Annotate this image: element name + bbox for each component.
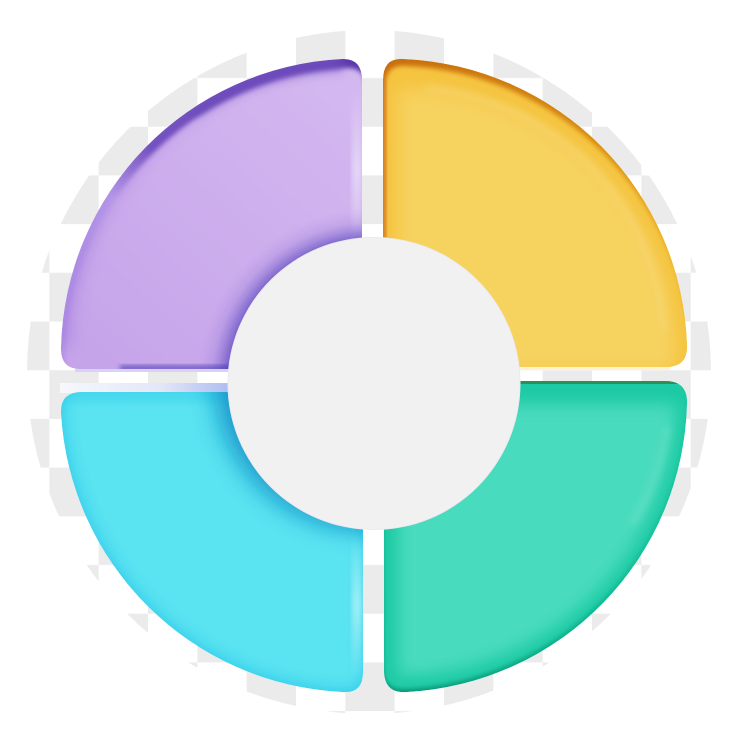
reflections in the gaps	[60, 367, 670, 393]
segment: purple quarter	[61, 59, 362, 369]
main green face	[398, 404, 676, 676]
main yellow face	[398, 90, 676, 372]
hub shadow on cyan	[202, 392, 363, 544]
segment: green quarter	[380, 378, 690, 692]
center hub circle	[228, 237, 520, 530]
highlight on purple right edge	[350, 112, 362, 226]
highlight on cyan right edge	[352, 530, 362, 680]
segment: cyan quarter	[61, 392, 363, 692]
hub shadow on purple	[208, 217, 362, 369]
segment: yellow quarter	[383, 59, 689, 379]
